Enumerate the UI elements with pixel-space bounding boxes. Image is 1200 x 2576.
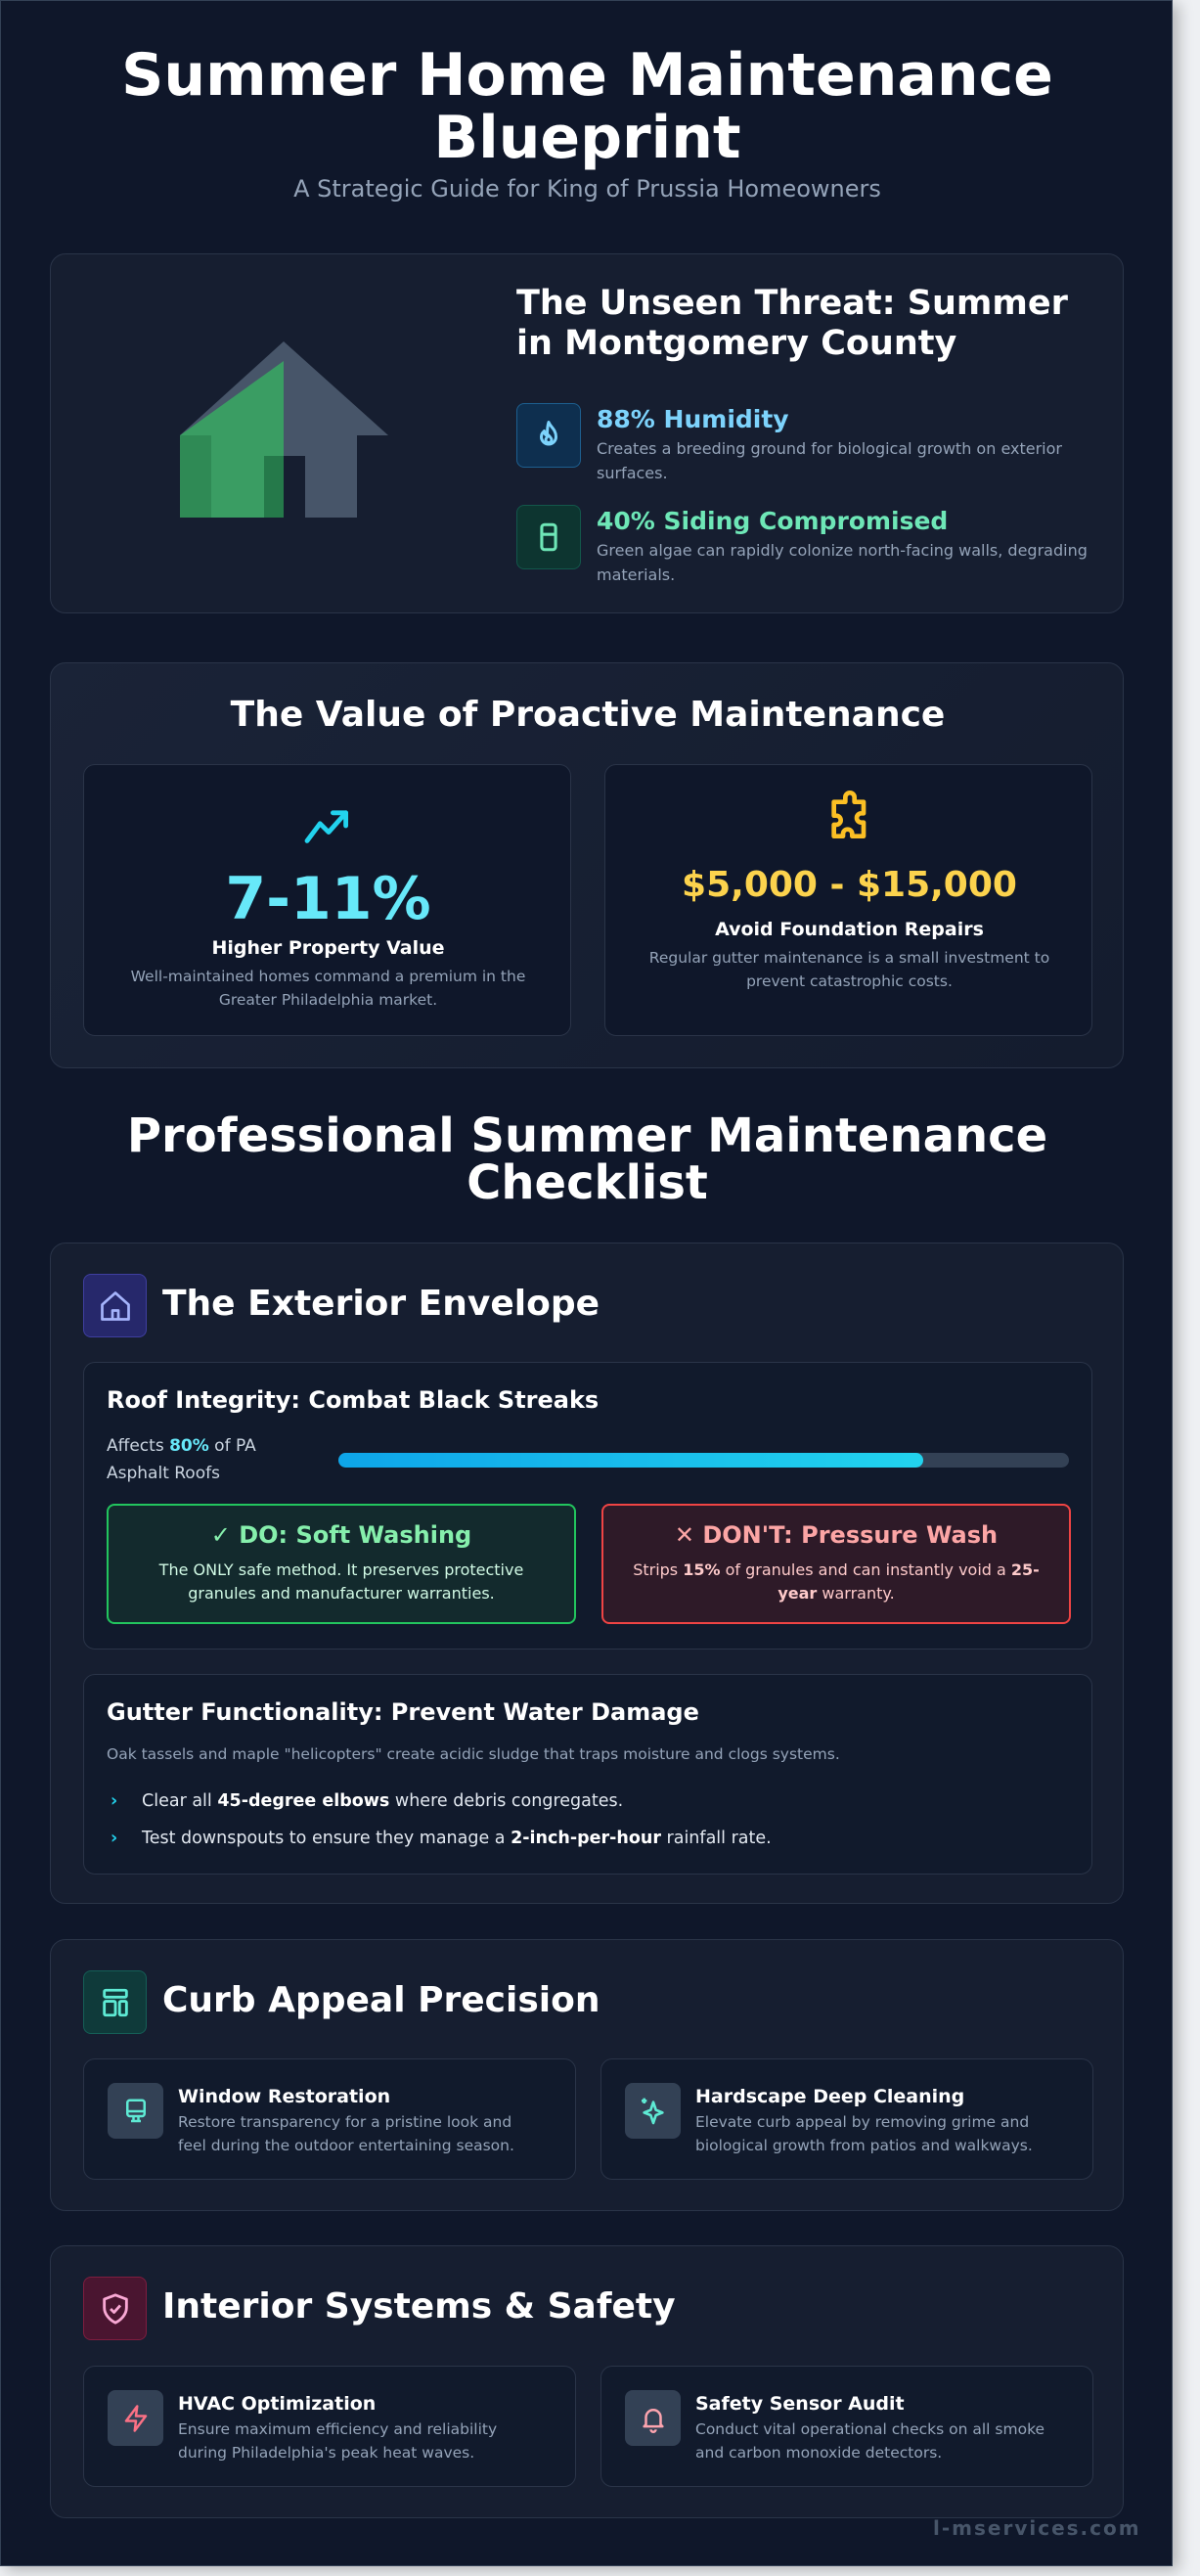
item: safety sensor <box>600 2366 1093 2487</box>
callout: do: The ONLY safe method. It preserves protective granules and manufacturer warranties. <box>159 1560 523 1603</box>
stat: siding: 40% Siding Compromised <box>597 507 948 535</box>
heading: checklist: Professional Summer Maintenance <box>127 1108 1047 1163</box>
panel: interior <box>50 2245 1124 2518</box>
heading: interior: Interior Systems & Safety <box>162 2286 676 2327</box>
callout: don't: Strips 15% of granules and can instantly void a 25-year warranty. <box>633 1560 1040 1603</box>
subcard: gutter: Gutter Functionality: Prevent Water Damage <box>107 1698 699 1726</box>
item: hardscape <box>600 2058 1093 2180</box>
item: hvac: HVAC Optimization <box>178 2393 376 2415</box>
stat card: property value: Higher Property Value <box>211 937 445 959</box>
bullet list: › <box>111 1829 117 1848</box>
item: hvac <box>83 2366 576 2487</box>
heading: checklist: Checklist <box>467 1155 708 1210</box>
icon: house <box>180 341 388 518</box>
subcard: gutter: Oak tassels and maple "helicopters" create acidic sludge that traps moisture and clogs systems. <box>107 1745 840 1763</box>
callout: do: ✓ DO: Soft Washing <box>211 1521 471 1549</box>
icon: siding <box>516 505 581 569</box>
panel: unseen threat <box>50 253 1124 613</box>
heading: curb: Curb Appeal Precision <box>162 1980 600 2020</box>
footer: brand: l-mservices.com <box>933 2516 1141 2540</box>
item: safety sensor: Safety Sensor Audit <box>695 2393 905 2415</box>
panel: exterior envelope <box>50 1243 1124 1904</box>
panel: curb appeal <box>50 1939 1124 2211</box>
panel: value <box>50 662 1124 1068</box>
bullet list: Test downspouts to ensure they manage a 2-inch-per-hour rainfall rate. <box>142 1829 772 1848</box>
title: Summer Home Maintenance <box>121 41 1053 110</box>
stat card: property value <box>83 764 571 1036</box>
stat: humidity: Creates a breeding ground for biological growth on exterior surfaces. <box>597 439 1062 482</box>
item: window: Restore transparency for a pristine look and feel during the outdoor entertaining season. <box>178 2113 514 2154</box>
stat: humidity: 88% Humidity <box>597 405 789 433</box>
stat card: foundation <box>604 764 1092 1036</box>
heading: unseen threat <box>516 284 1068 363</box>
bullet list <box>111 1791 772 1848</box>
callout: don't <box>601 1504 1071 1624</box>
icon: puzzle <box>831 791 867 838</box>
stat: siding <box>516 505 1088 584</box>
title: Blueprint <box>433 104 741 172</box>
heading: checklist <box>127 1108 1047 1210</box>
text: affects: Affects 80% of PA Asphalt Roofs <box>107 1436 256 1483</box>
stat card: property value: Well-maintained homes command a premium in the Greater Philadelphia market. <box>131 968 525 1009</box>
item: hardscape: Elevate curb appeal by removing grime and biological growth from patios and walkways. <box>695 2113 1033 2154</box>
callout: do <box>107 1504 576 1624</box>
heading: unseen threat: in Montgomery County <box>516 324 956 363</box>
stat card: foundation: Regular gutter maintenance is a small investment to prevent catastrophic costs. <box>649 949 1049 990</box>
bullet list: › <box>111 1791 117 1811</box>
stat card: foundation: Avoid Foundation Repairs <box>715 919 984 940</box>
heading: value: The Value of Proactive Maintenance <box>231 695 945 735</box>
item: hvac: Ensure maximum efficiency and reliability during Philadelphia's peak heat waves. <box>178 2420 497 2462</box>
stat card: property value: 7-11% <box>225 865 431 933</box>
item: hardscape: Hardscape Deep Cleaning <box>695 2086 964 2107</box>
heading: unseen threat: The Unseen Threat: Summer <box>516 284 1068 323</box>
subcard: roof <box>83 1362 1092 1650</box>
icon: layout <box>83 1970 147 2034</box>
subtitle: A Strategic Guide for King of Prussia Homeowners <box>293 175 881 203</box>
title <box>121 41 1053 172</box>
icon: shield <box>83 2277 147 2340</box>
item: safety sensor: Conduct vital operational checks on all smoke and carbon monoxide detectors. <box>695 2420 1044 2462</box>
icon: flame <box>516 403 581 468</box>
item: window: Window Restoration <box>178 2086 390 2107</box>
progress bar <box>338 1453 1069 1468</box>
subcard: gutter <box>83 1674 1092 1875</box>
bullet list: Clear all 45-degree elbows where debris congregates. <box>142 1791 623 1811</box>
stat card: foundation: $5,000 - $15,000 <box>682 865 1017 905</box>
heading: exterior: The Exterior Envelope <box>162 1284 600 1324</box>
icon: home <box>83 1274 147 1337</box>
icon: trend <box>305 810 348 843</box>
stat: siding: Green algae can rapidly colonize north-facing walls, degrading materials. <box>597 541 1088 584</box>
subcard: roof: Roof Integrity: Combat Black Streaks <box>107 1386 599 1414</box>
item: window <box>83 2058 576 2180</box>
callout: don't: ✕ DON'T: Pressure Wash <box>675 1521 998 1549</box>
stat: humidity <box>516 403 1062 482</box>
